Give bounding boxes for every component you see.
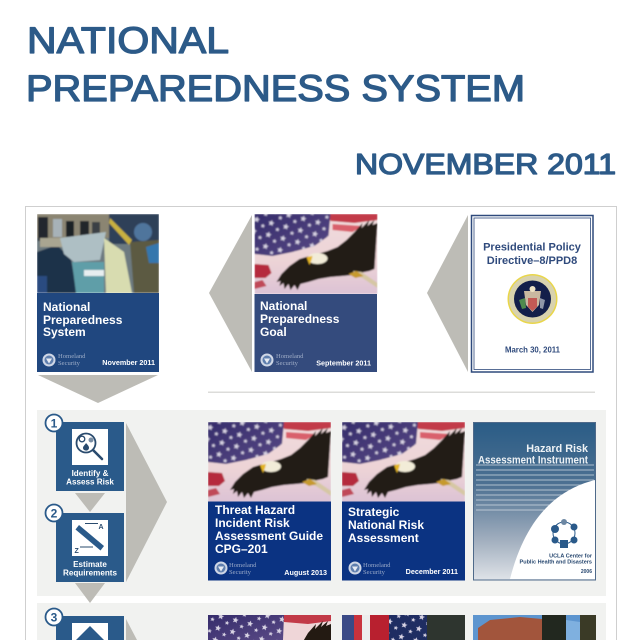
cover: National Preparedness Goal: Preparedness bbox=[260, 312, 340, 326]
panel: risk row bbox=[37, 410, 606, 596]
title bbox=[26, 20, 525, 109]
title: NATIONAL bbox=[27, 20, 229, 61]
date heading: NOVEMBER 2011 bbox=[355, 149, 616, 181]
badge: 2 bbox=[46, 504, 62, 522]
step 1: identify and assess risk bbox=[56, 422, 124, 491]
cover: Hazard Risk Assessment Instrument: Public Health and Disasters bbox=[520, 560, 592, 566]
badge: 3 bbox=[46, 608, 62, 626]
cover: National Preparedness System: Homeland bbox=[58, 353, 86, 360]
panel: next row bbox=[37, 603, 606, 640]
step 1: identify and assess risk: Assess Risk bbox=[66, 478, 114, 486]
badge: 1: 1 bbox=[51, 416, 58, 430]
cover: National Preparedness Goal: September 2011 bbox=[316, 358, 371, 368]
panel: outer frame bbox=[26, 206, 616, 640]
arrow: directive to goal bbox=[427, 215, 468, 372]
step 1: identify and assess risk: Identify & bbox=[72, 469, 109, 478]
cover: Hazard Risk Assessment Instrument: 2006 bbox=[581, 569, 592, 575]
arrow: system down bbox=[38, 375, 158, 403]
cover: National Preparedness System: National bbox=[43, 300, 90, 314]
cover: National Preparedness System: Preparedness bbox=[43, 313, 123, 327]
arrow: step 1 to step 2 bbox=[75, 493, 105, 512]
cover: Presidential Policy Directive: March 30, 2011 bbox=[505, 346, 561, 354]
arrow: row 3 to covers bbox=[126, 619, 137, 640]
cover: Strategic National Risk Assessment: Strategic bbox=[348, 505, 400, 519]
cover: Strategic National Risk Assessment: Assessment bbox=[348, 531, 419, 545]
step 2: estimate requirements: Requirements bbox=[63, 568, 117, 578]
cover: Hazard Risk Assessment Instrument: Assessment Instrument bbox=[478, 454, 588, 466]
icon: ruler A to Z: Z bbox=[74, 548, 80, 555]
title: PREPAREDNESS SYSTEM bbox=[26, 68, 525, 109]
cover: Threat Hazard Incident Risk Assessment Guide: Assessment Guide bbox=[215, 529, 323, 543]
cover: National Preparedness Goal: Security bbox=[276, 360, 299, 367]
cover: Threat Hazard Incident Risk Assessment Guide: August 2013 bbox=[284, 568, 327, 577]
cover: National Preparedness System: System bbox=[43, 325, 86, 339]
cover: National Preparedness System bbox=[37, 214, 159, 372]
step 3: build capabilities bbox=[56, 616, 124, 640]
cover: Hazard Risk Assessment Instrument: UCLA Center for bbox=[549, 554, 593, 560]
cover: National Preparedness Goal: Goal bbox=[260, 325, 287, 339]
cover: Threat Hazard Incident Risk Assessment Guide bbox=[208, 422, 331, 580]
cover: Strategic National Risk Assessment bbox=[342, 422, 465, 580]
cover: row 3 building photo bbox=[473, 615, 596, 640]
badge: 2: 2 bbox=[51, 506, 58, 520]
cover: National Preparedness Goal: Homeland bbox=[276, 353, 304, 360]
cover: Presidential Policy Directive: Directive–8/PPD8 bbox=[487, 255, 577, 267]
icon: magnifier bbox=[76, 434, 102, 459]
cover: Threat Hazard Incident Risk Assessment Guide: Incident Risk bbox=[215, 516, 290, 530]
arrow: step 2 to step 3 bbox=[75, 583, 105, 603]
arrow: goal to system bbox=[209, 215, 252, 372]
cover: Strategic National Risk Assessment: December 2011 bbox=[406, 567, 458, 576]
icon: ruler A to Z: A bbox=[98, 524, 104, 531]
step 2: estimate requirements: Estimate bbox=[73, 560, 107, 569]
cover: Strategic National Risk Assessment: Security bbox=[363, 569, 386, 576]
badge: 3: 3 bbox=[51, 610, 58, 624]
cover: Hazard Risk Assessment Instrument: Hazard Risk bbox=[526, 443, 589, 455]
icon: ruler A to Z bbox=[74, 524, 104, 555]
cover: Hazard Risk Assessment Instrument bbox=[474, 422, 596, 580]
icon: UCLA logo bbox=[551, 519, 578, 548]
cover: Presidential Policy Directive bbox=[472, 216, 593, 372]
cover: Threat Hazard Incident Risk Assessment Guide: CPG–201 bbox=[215, 542, 268, 556]
cover: row 3 flag photo bbox=[342, 615, 465, 640]
cover: Presidential Policy Directive: Presidential Policy bbox=[483, 242, 582, 254]
cover: National Preparedness System: Security bbox=[58, 360, 81, 367]
icon: presidential seal bbox=[508, 274, 558, 324]
badge: 1 bbox=[46, 414, 62, 432]
cover: National Preparedness Goal bbox=[254, 214, 378, 372]
cover: Strategic National Risk Assessment: National Risk bbox=[348, 518, 424, 532]
cover: Threat Hazard Incident Risk Assessment Guide: Homeland bbox=[229, 562, 257, 569]
cover: National Preparedness Goal: National bbox=[260, 299, 307, 313]
cover: Strategic National Risk Assessment: Homeland bbox=[363, 562, 391, 569]
cover: Threat Hazard Incident Risk Assessment Guide: Threat Hazard bbox=[215, 503, 295, 517]
step 2: estimate requirements bbox=[56, 513, 124, 582]
cover: National Preparedness System: November 2011 bbox=[102, 358, 155, 367]
cover: Threat Hazard Incident Risk Assessment Guide: Security bbox=[229, 569, 252, 576]
cover: row 3 eagle bbox=[208, 615, 331, 640]
arrow: risk row to covers bbox=[126, 423, 167, 582]
icon: house bbox=[76, 626, 104, 640]
